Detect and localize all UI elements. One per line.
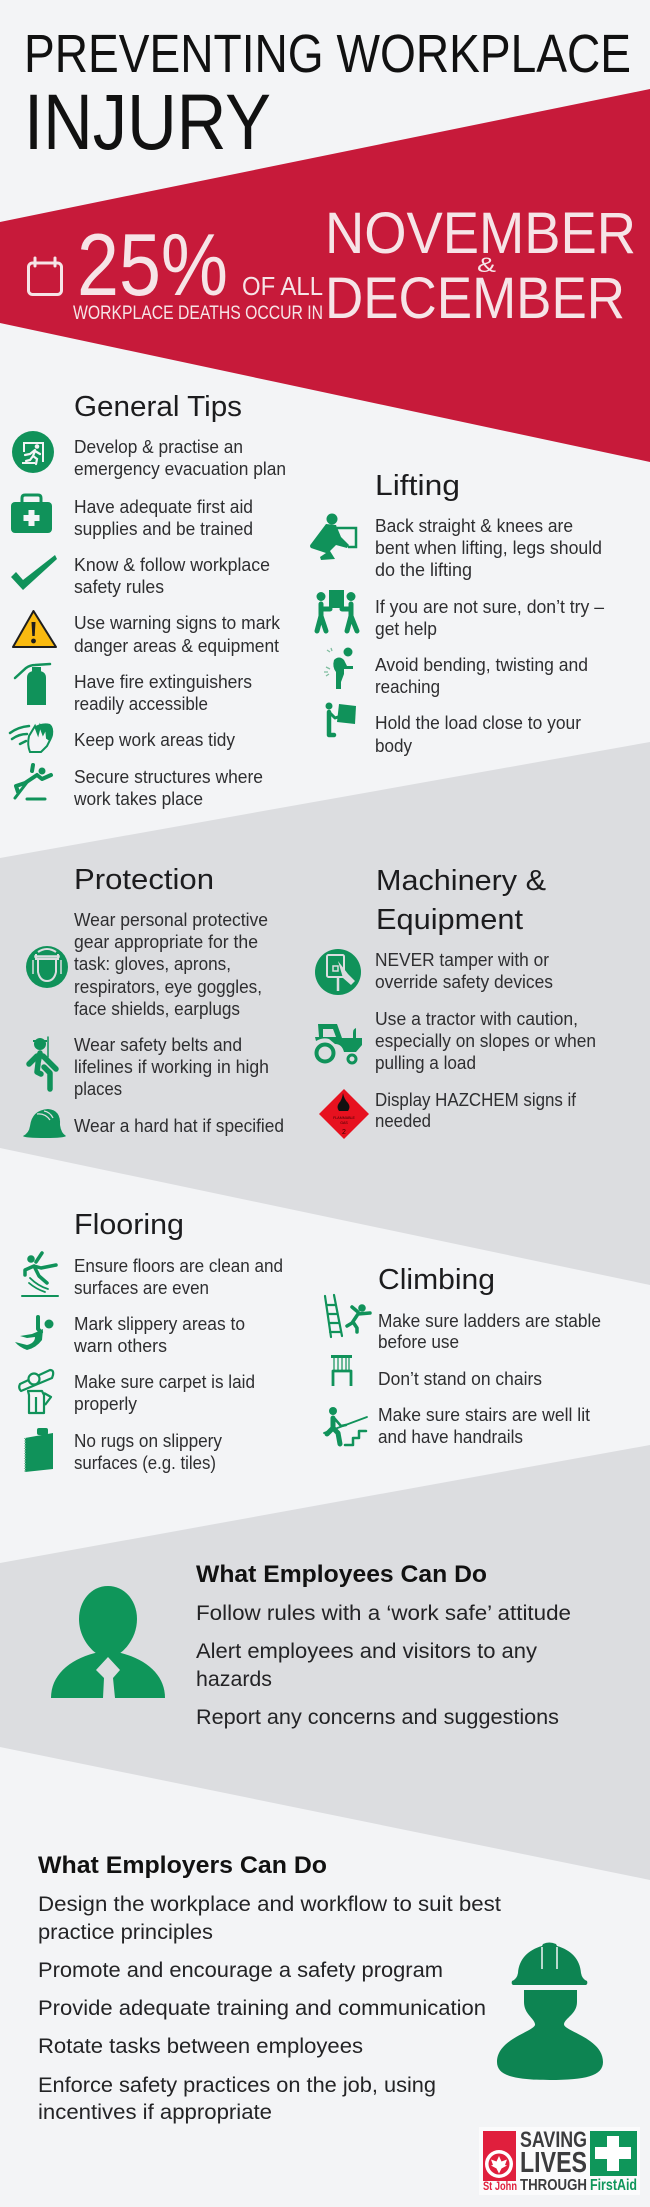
text: employer actions: Promote and encourage a safety program — [38, 1959, 443, 1982]
tip: back straight — [375, 516, 602, 580]
tip: safety devices: override safety devices — [375, 972, 553, 992]
tip: fire extinguishers — [74, 672, 252, 714]
background: grey band one — [0, 742, 650, 1285]
tip: secure structures — [73, 767, 263, 809]
icon: hazchem flammable diamond: 2 — [342, 1129, 346, 1136]
text: employer actions: Provide adequate training and communication — [38, 1997, 486, 2020]
tip: clean floors: surfaces are even — [74, 1278, 209, 1298]
icon: protective gear sign — [26, 946, 68, 988]
tip: hold load — [375, 713, 581, 756]
panel: machinery and equipment — [315, 865, 596, 1139]
text: employee actions: Report any concerns and suggestions — [196, 1706, 559, 1729]
tip: get help: If you are not sure, don’t try – — [375, 597, 604, 617]
panel: flooring — [15, 1209, 283, 1473]
icon: worker in hard hat — [497, 1942, 603, 2080]
tip: tidy work areas: Keep work areas tidy — [74, 730, 235, 750]
banner: statistic — [28, 201, 636, 331]
icon: ladder fall — [325, 1295, 370, 1337]
tip: avoid bending — [375, 655, 588, 697]
tip: secure structures: work takes place — [73, 789, 203, 809]
icon: employee with tie — [51, 1586, 165, 1698]
text: employer actions: incentives if appropriate — [38, 2101, 272, 2124]
tip: safety rules: safety rules — [74, 577, 164, 597]
text: employee actions — [196, 1602, 571, 1729]
icon: hard hat — [23, 1109, 66, 1138]
tip: evacuation plan — [74, 437, 286, 479]
tip: safety rules — [74, 555, 270, 597]
tip: warning signs: danger areas & equipment — [74, 636, 279, 656]
tip: protective gear: respirators, eye goggles, — [74, 977, 262, 997]
tip: tractor caution — [375, 1009, 596, 1073]
tip: safety belts: places — [74, 1079, 122, 1099]
tip: protective gear: face shields, earplugs — [74, 999, 240, 1019]
panel: lifting — [310, 470, 604, 756]
tip: protective gear: task: gloves, aprons, — [74, 954, 231, 974]
tip: tractor caution: Use a tractor with caution, — [375, 1009, 578, 1029]
icon: chair — [331, 1355, 352, 1386]
tip: clean floors — [74, 1256, 283, 1298]
heading: machinery and equipment: Equipment — [376, 904, 523, 936]
tip: clean floors: Ensure floors are clean and — [74, 1256, 283, 1276]
tip: back straight: bent when lifting, legs should — [375, 538, 602, 558]
icon: squatting lift — [310, 514, 356, 560]
tip: tractor caution: especially on slopes or when — [375, 1031, 596, 1051]
tip: no rugs: No rugs on slippery — [74, 1431, 222, 1451]
title — [24, 24, 631, 166]
icon: hazchem flammable diamond: FLAMMABLE — [333, 1116, 355, 1120]
panel: general tips — [10, 391, 286, 809]
tip: safety rules: Know & follow workplace — [74, 555, 270, 575]
icon: stairs with handrail — [324, 1407, 367, 1445]
heading: machinery and equipment — [376, 865, 546, 936]
heading: climbing: Climbing — [378, 1264, 495, 1296]
tip: hold load: body — [375, 736, 412, 756]
icon: two people carrying box — [316, 590, 357, 631]
text: employee actions: hazards — [196, 1668, 272, 1691]
text: ampersand: & — [477, 254, 496, 277]
logo: saving lives through first aid: THROUGH — [520, 2177, 587, 2194]
tip: safety belts: lifelines if working in high — [74, 1057, 269, 1077]
tip: chairs: Don’t stand on chairs — [378, 1369, 542, 1389]
text: employer actions: Enforce safety practices on the job, using — [38, 2074, 436, 2097]
heading: flooring: Flooring — [74, 1209, 184, 1241]
panel: what employers can do — [38, 1852, 603, 2124]
tip: hard hat: Wear a hard hat if specified — [74, 1116, 284, 1136]
icon: rug — [25, 1428, 53, 1472]
title: INJURY — [24, 77, 271, 166]
logo: saving lives through first aid: SAVING — [520, 2127, 587, 2152]
tip: hold load: Hold the load close to your — [375, 713, 581, 733]
tip: back straight: do the lifting — [375, 560, 472, 580]
text: employee actions: Follow rules with a ‘work safe’ attitude — [196, 1602, 571, 1625]
panel: climbing — [324, 1264, 601, 1447]
tip: get help — [375, 597, 604, 639]
icon: check mark — [11, 555, 57, 590]
icon: fire extinguisher — [15, 664, 50, 705]
tip: evacuation plan: emergency evacuation plan — [74, 459, 286, 479]
tip: first aid: supplies and be trained — [74, 519, 253, 539]
text: employer actions — [38, 1893, 501, 2124]
text: december: DECEMBER — [325, 266, 625, 331]
tip: carpet laid properly: Make sure carpet is laid — [74, 1372, 255, 1392]
tip: hazchem signs: Display HAZCHEM signs if — [375, 1090, 577, 1110]
panel: protection — [23, 864, 284, 1138]
tip: stairs — [378, 1405, 590, 1447]
tip: stable ladders — [378, 1311, 601, 1352]
tip: avoid bending: Avoid bending, twisting and — [375, 655, 588, 675]
icon: holding load close — [326, 702, 356, 735]
text: november: NOVEMBER — [325, 201, 636, 266]
icon: safety harness person — [29, 1037, 56, 1089]
tip: carpet laid properly — [74, 1372, 255, 1414]
icon: first aid kit — [11, 495, 52, 533]
tip: protective gear: Wear personal protective — [74, 910, 268, 930]
tip: back straight: Back straight & knees are — [375, 516, 573, 536]
icon: person carrying carpet — [19, 1370, 53, 1413]
tip: tractor caution: pulling a load — [375, 1053, 476, 1073]
text: workplace deaths occur in: WORKPLACE DEATHS OCCUR IN — [73, 302, 323, 324]
tip: hazchem signs — [375, 1090, 577, 1131]
logo: saving lives through first aid: FirstAid — [590, 2177, 637, 2194]
heading: general tips: General Tips — [74, 391, 242, 423]
tip: stairs: and have handrails — [378, 1427, 523, 1447]
tip: protective gear — [74, 910, 268, 1019]
tip: first aid — [74, 497, 253, 539]
tip: fire extinguishers: readily accessible — [74, 694, 208, 714]
icon: wet floor slip — [22, 1253, 58, 1296]
tip: stable ladders: Make sure ladders are stable — [378, 1311, 601, 1331]
tip: warning signs — [74, 613, 281, 656]
tip: evacuation plan: Develop & practise an — [74, 437, 243, 457]
heading: machinery and equipment: Machinery & — [376, 865, 546, 897]
logo: saving lives through first aid: St John — [483, 2179, 517, 2193]
tip: safety belts: Wear safety belts and — [74, 1035, 242, 1055]
tip: hazchem signs: needed — [375, 1111, 431, 1131]
icon: emergency exit — [12, 431, 54, 473]
tip: safety devices: NEVER tamper with or — [375, 950, 549, 970]
icon: hazchem flammable diamond — [319, 1089, 369, 1139]
tip: protective gear: gear appropriate for the — [74, 932, 258, 952]
text: employer actions: Design the workplace and workflow to suit best — [38, 1893, 501, 1916]
tip: no rugs: surfaces (e.g. tiles) — [74, 1453, 216, 1473]
tip: get help: get help — [375, 619, 437, 639]
tip: mark slippery areas — [73, 1314, 245, 1356]
tip: avoid bending: reaching — [375, 677, 440, 697]
tip: stairs: Make sure stairs are well lit — [378, 1405, 590, 1425]
heading: lifting: Lifting — [375, 470, 460, 502]
icon: hand wiping — [10, 723, 53, 752]
heading: protection: Protection — [74, 864, 214, 896]
tip: safety devices — [375, 950, 553, 992]
logo: saving lives through first aid: LIVES — [520, 2147, 587, 2179]
panel: what employees can do — [51, 1561, 571, 1729]
text: employer actions: practice principles — [38, 1921, 213, 1944]
background: grey band two — [0, 1445, 650, 1880]
icon: warning triangle — [13, 611, 56, 647]
icon: person with back pain — [324, 648, 353, 689]
heading: what employees can do: What Employees Can Do — [196, 1561, 487, 1588]
icon: person slipping — [15, 1317, 54, 1350]
text: of all: OF ALL — [242, 271, 323, 301]
tip: fire extinguishers: Have fire extinguishers — [74, 672, 252, 692]
text: employer actions: Rotate tasks between employees — [38, 2035, 363, 2058]
text: employee actions: Alert employees and visitors to any — [196, 1640, 538, 1663]
tip: first aid: Have adequate first aid — [74, 497, 253, 517]
icon: tractor — [315, 1024, 362, 1063]
icon: calendar — [28, 258, 62, 294]
tip: mark slippery areas: warn others — [73, 1336, 167, 1356]
tip: no rugs — [74, 1431, 222, 1473]
icon: safety device — [315, 949, 361, 995]
tip: secure structures: Secure structures where — [74, 767, 263, 787]
heading: what employers can do: What Employers Can Do — [38, 1852, 327, 1879]
logo: saving lives through first aid — [479, 2127, 640, 2195]
icon: person falling — [15, 765, 51, 799]
tip: carpet laid properly: properly — [74, 1394, 137, 1414]
background: red banner wedge — [0, 89, 650, 462]
icon: hazchem flammable diamond: GAS — [340, 1121, 348, 1125]
tip: safety belts — [74, 1035, 269, 1099]
tip: stable ladders: before use — [378, 1332, 459, 1352]
tip: mark slippery areas: Mark slippery areas to — [74, 1314, 245, 1334]
tip: warning signs: Use warning signs to mark — [74, 613, 281, 633]
stat: 25 percent: 25% — [77, 215, 228, 314]
